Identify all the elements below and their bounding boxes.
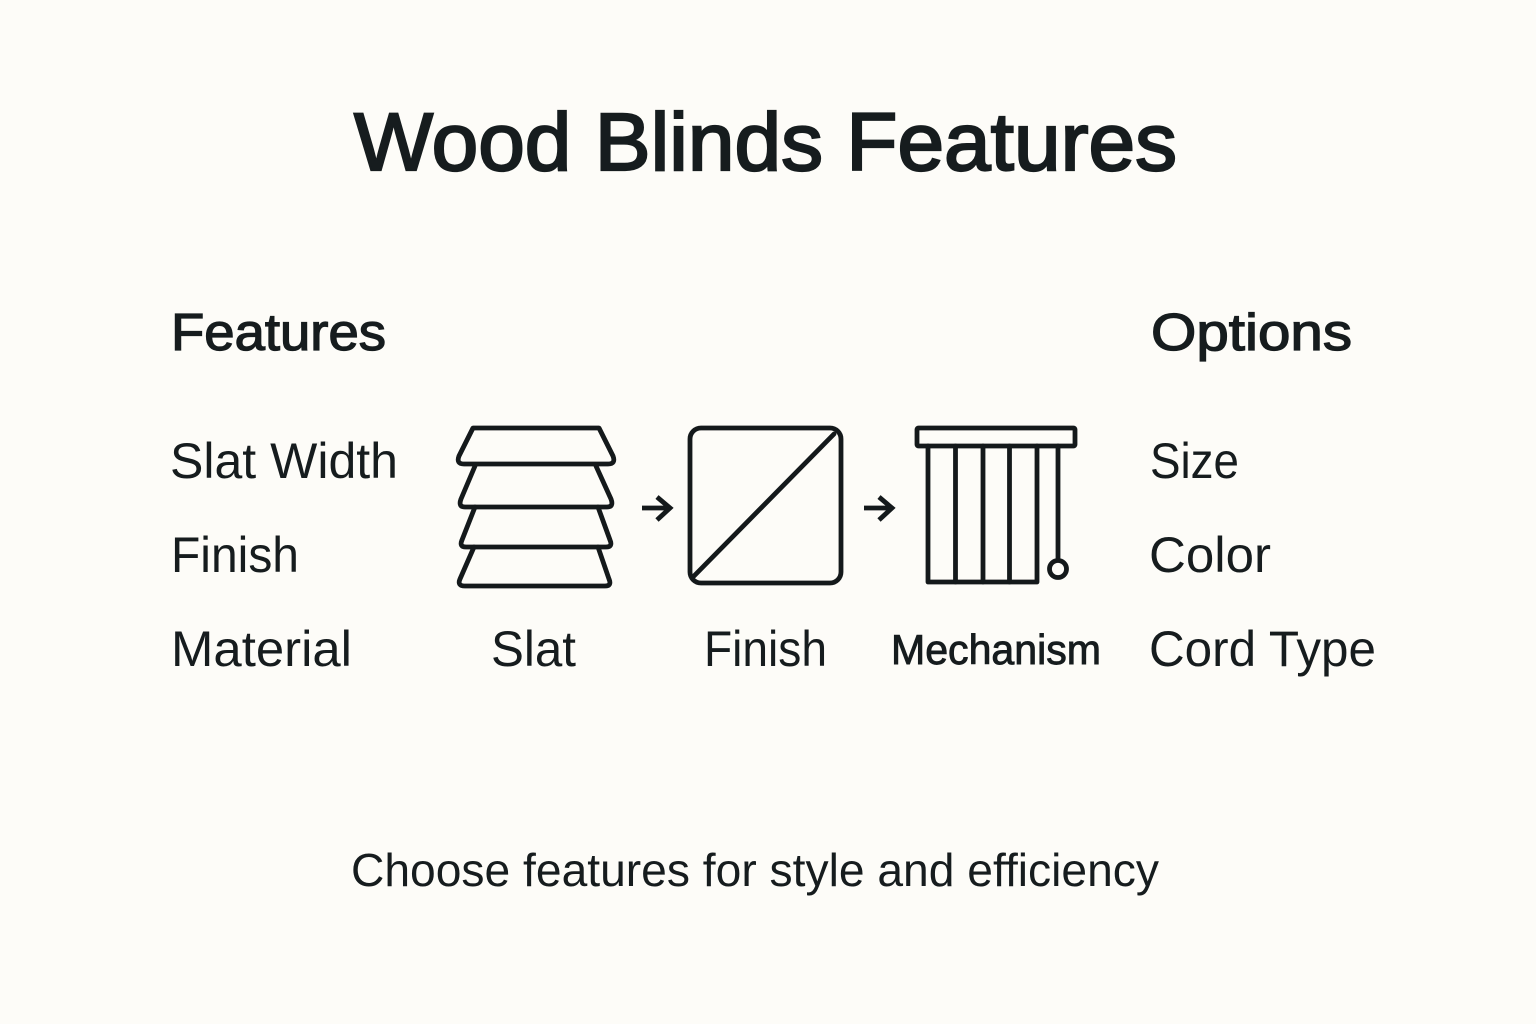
panel: features column <box>170 304 398 677</box>
arrow: slat to finish <box>642 497 670 520</box>
heading: options: Options <box>1151 304 1352 362</box>
feature: finish: Finish <box>171 527 299 583</box>
icon: stacked slats <box>458 428 614 586</box>
label: finish: Finish <box>704 621 827 677</box>
label: mechanism: Mechanism <box>891 626 1101 673</box>
feature: material: Material <box>171 621 352 677</box>
icon: vertical blinds mechanism <box>917 428 1075 582</box>
option: cord type: Cord Type <box>1149 621 1376 677</box>
option: color: Color <box>1149 527 1271 583</box>
title: Wood Blinds Features <box>354 97 1177 188</box>
panel: options column <box>1149 304 1376 677</box>
arrow: finish to mechanism <box>864 497 892 520</box>
heading: features: Features <box>171 304 386 362</box>
label: slat: Slat <box>491 621 576 677</box>
icon: finish square <box>690 428 841 583</box>
feature: slat width: Slat Width <box>170 433 398 489</box>
option: size: Size <box>1150 433 1239 489</box>
footer tagline: Choose features for style and efficiency <box>351 844 1159 896</box>
